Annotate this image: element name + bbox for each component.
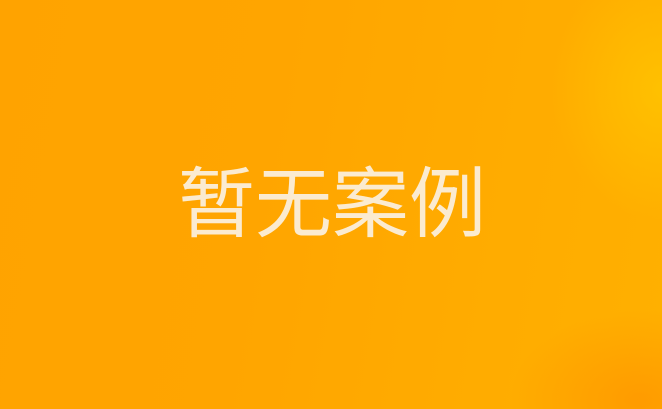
title: no cases yet: 暂无案例: [178, 162, 486, 248]
